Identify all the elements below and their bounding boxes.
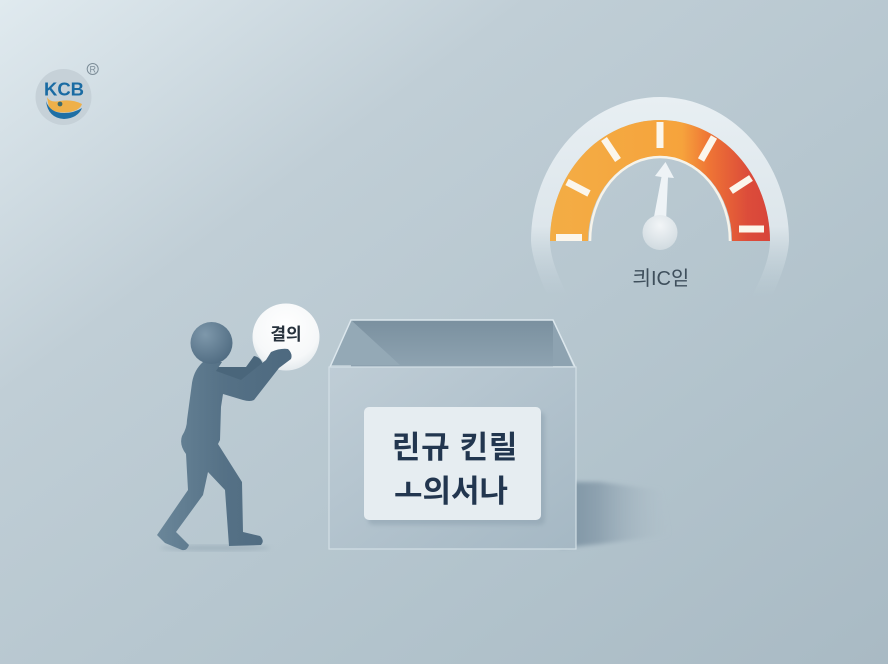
label line 2: ㅗ의서나 [394, 474, 508, 509]
logo swoosh [46, 97, 82, 119]
logo wordmark: KCB [44, 78, 84, 100]
gauge outer ring [531, 97, 789, 296]
gauge hub [642, 215, 678, 250]
figure body [157, 349, 292, 550]
registered mark: R [89, 64, 96, 74]
ground shadow [160, 545, 270, 551]
box right wall [553, 320, 573, 366]
logo: KCB [36, 64, 98, 125]
box front [329, 367, 576, 549]
ball label: 결의 [270, 325, 302, 344]
gauge needle [653, 162, 674, 222]
box cast shadow [560, 482, 670, 548]
gauge [531, 97, 789, 296]
box [329, 320, 670, 549]
box back wall [351, 320, 553, 367]
ball [252, 304, 320, 370]
box rim [330, 320, 575, 367]
figure pushing ball [157, 304, 320, 551]
gauge inner rim [590, 157, 730, 241]
figure back arm [212, 356, 263, 383]
box left wall [331, 320, 400, 365]
gauge coloured arc [550, 120, 770, 241]
figure head [190, 322, 232, 364]
label line 1: 린규 킨릴 [392, 430, 518, 465]
gauge label: 킈IC읻 [633, 267, 689, 290]
label panel [364, 407, 545, 525]
gauge ticks [556, 122, 764, 238]
